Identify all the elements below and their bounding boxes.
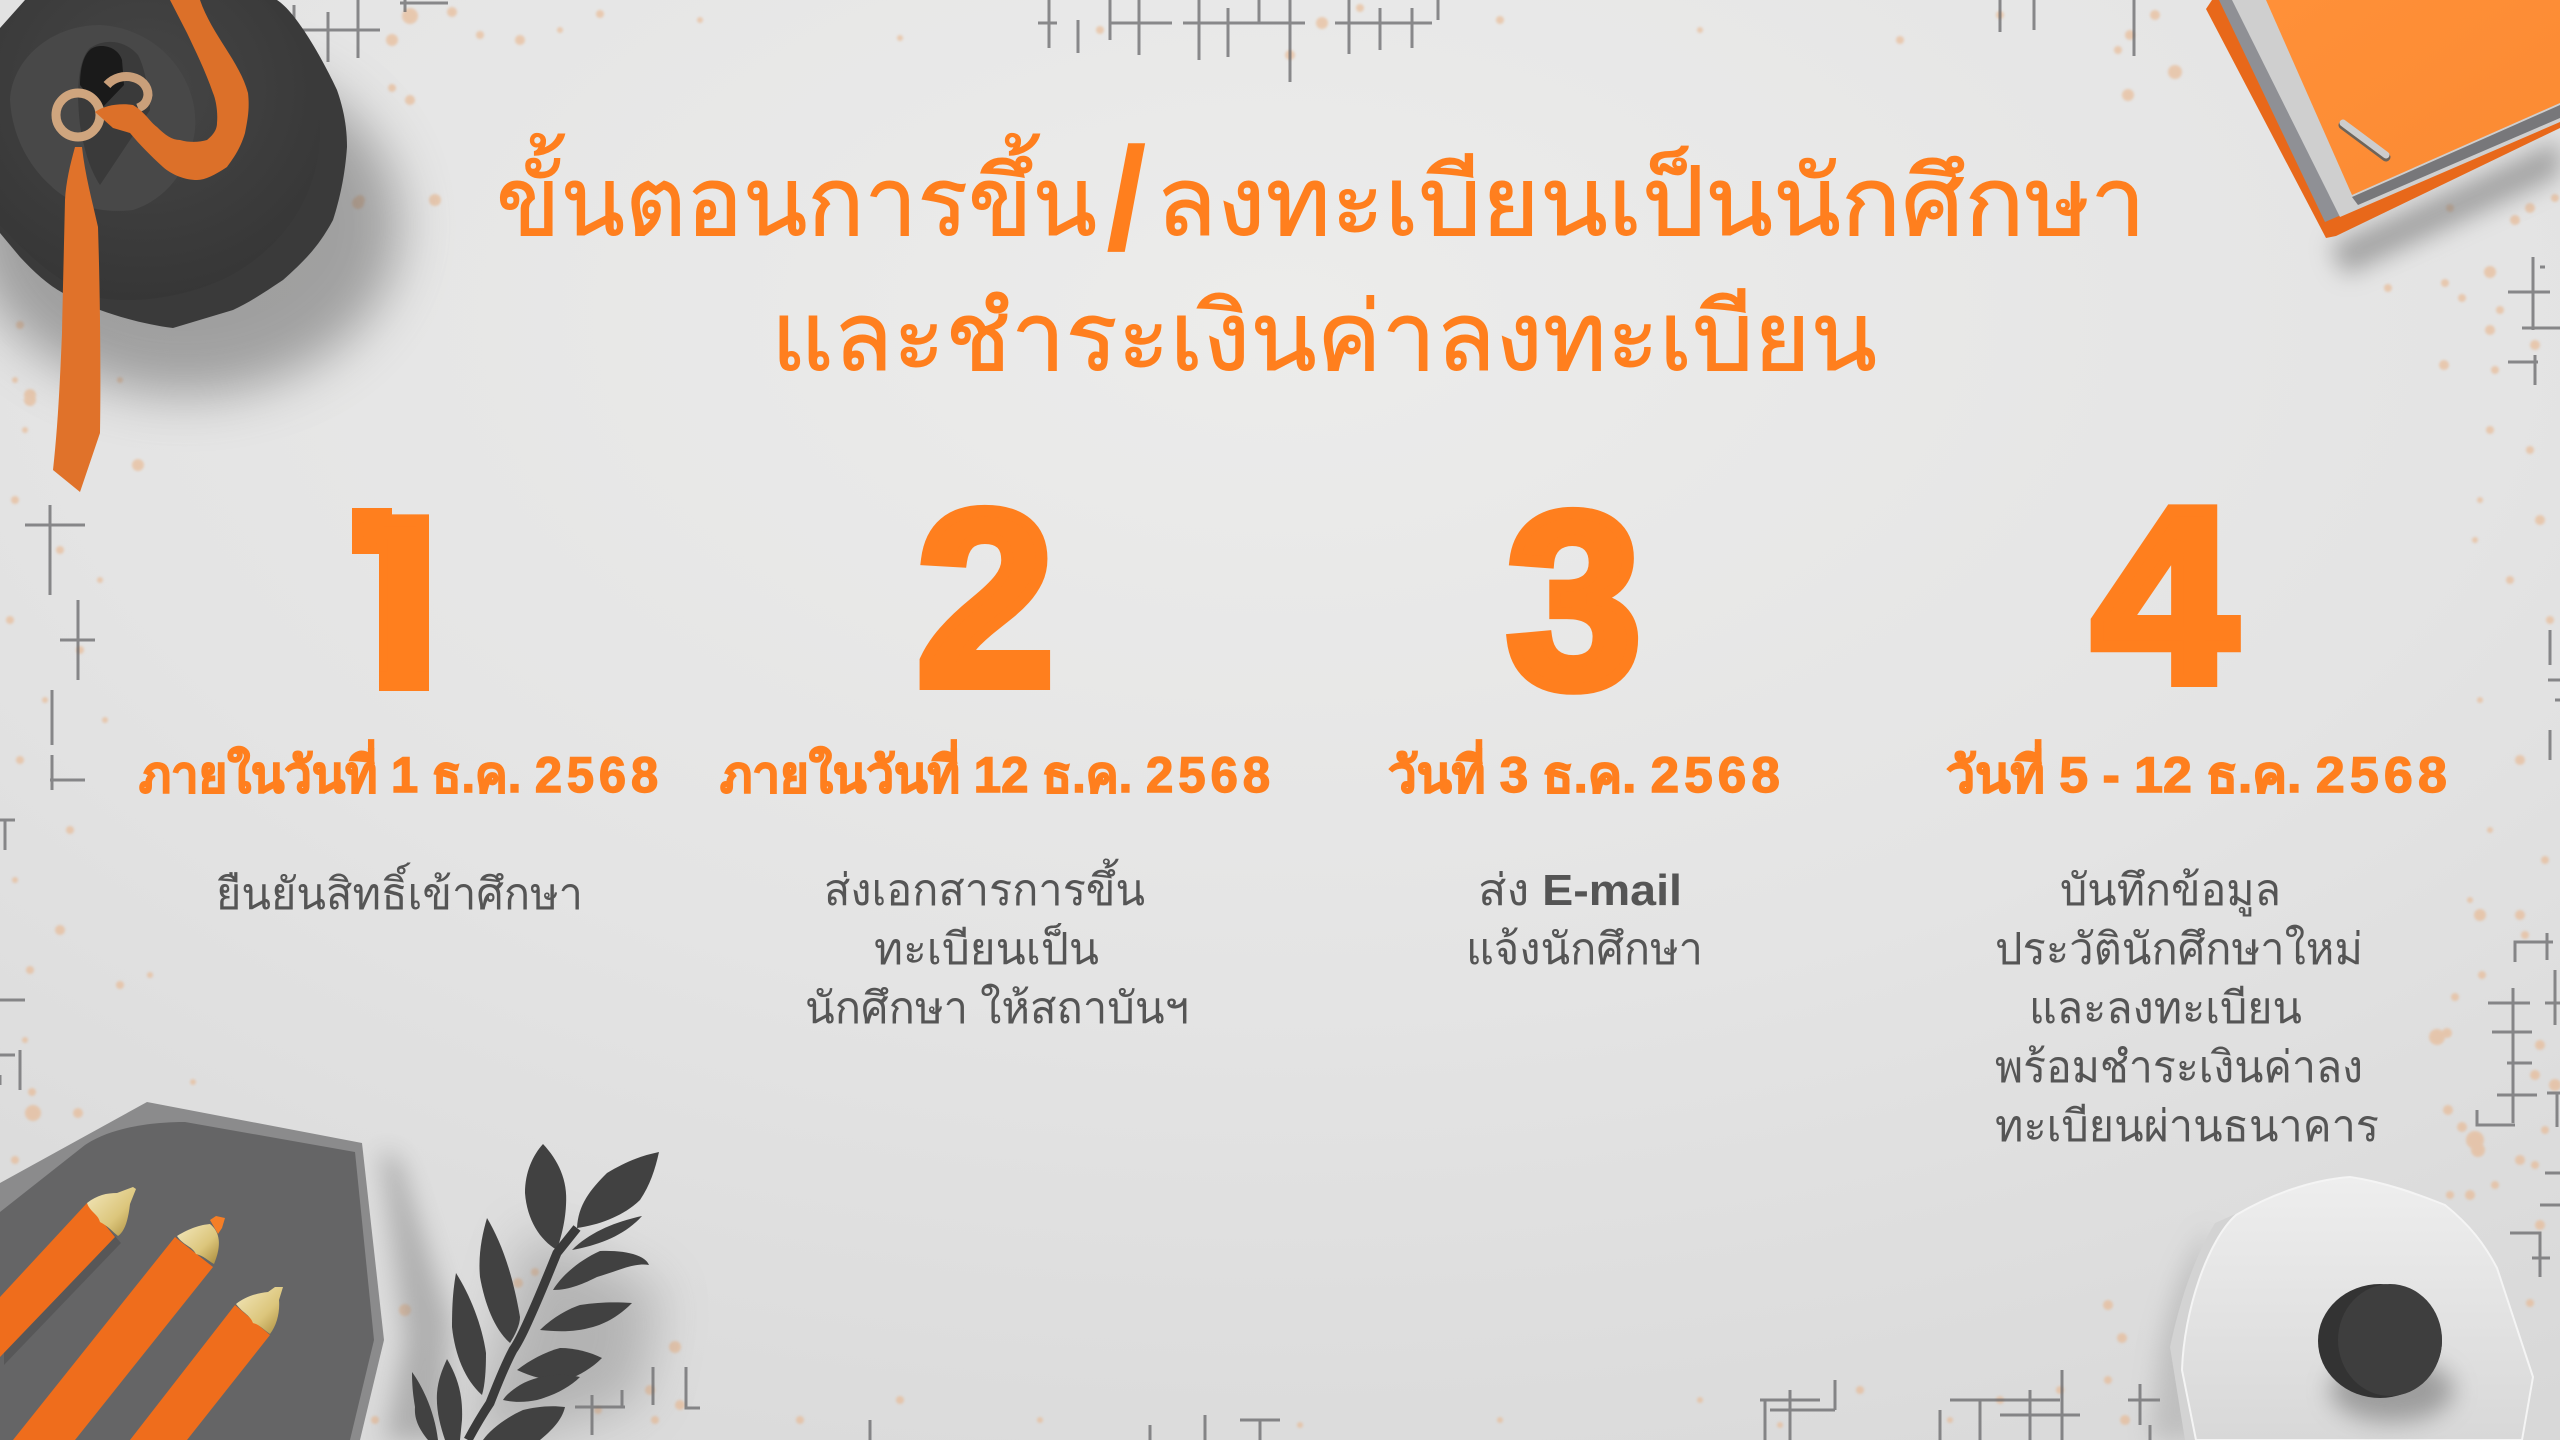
step 2 description: ส่งเอกสารการขึ้น — [824, 858, 1145, 915]
title: ลงทะเบียนเป็นนักศึกษา — [1156, 145, 2146, 256]
knob — [2318, 1284, 2442, 1398]
step 3 — [1388, 461, 1785, 974]
title: / — [1106, 117, 1147, 280]
orange pencils — [0, 1187, 283, 1440]
step 1 number: 1 — [303, 466, 485, 744]
title: ขั้นตอนการขึ้น — [496, 133, 1097, 256]
grey stone tray — [0, 1102, 450, 1440]
step 3 description: แจ้งนักศึกษา — [1466, 925, 1703, 974]
step 4 description — [1995, 866, 2379, 1151]
bell inner disc — [10, 25, 195, 211]
step 1 description: ยืนยันสิทธิ์เข้าศึกษา — [216, 862, 583, 919]
metal pin — [2343, 125, 2386, 157]
step 1 — [139, 508, 658, 910]
step 1 date: ภายในวันที่ 1 ธ.ค. 2568 — [139, 740, 663, 803]
step 1 number — [352, 508, 429, 691]
step 4 description: พร้อมชำระเงินค่าลง — [1995, 1043, 2363, 1092]
dark leaf sprig — [412, 1144, 660, 1440]
step 2 description — [805, 858, 1189, 1033]
title: และชำระเงินค่าลงทะเบียน — [771, 284, 1877, 391]
step 3 number: 3 — [1507, 461, 1641, 739]
step 2 date: ภายในวันที่ 12 ธ.ค. 2568 — [720, 740, 1275, 803]
bell with orange strap — [0, 0, 400, 492]
step 4 description: และลงทะเบียน — [2029, 984, 2302, 1033]
stacked orange books — [2206, 0, 2560, 275]
step 2 description: ทะเบียนเป็น — [874, 923, 1099, 974]
step 3 description: ส่ง E-mail — [1478, 866, 1682, 915]
step 4 date: วันที่ 5 - 12 ธ.ค. 2568 — [1946, 740, 2452, 803]
step 4 description: ประวัตินักศึกษาใหม่ — [1995, 924, 2363, 974]
step 4 number: 4 — [2093, 456, 2236, 734]
step 4 description: บันทึกข้อมูล — [2060, 866, 2281, 917]
step 2 description: นักศึกษา ให้สถาบันฯ — [805, 983, 1189, 1033]
title — [496, 117, 2146, 391]
step 3 description — [1466, 866, 1703, 974]
step 4 — [1946, 456, 2452, 1151]
step 3 date: วันที่ 3 ธ.ค. 2568 — [1388, 740, 1785, 803]
strap — [95, 0, 249, 180]
step 2 — [720, 459, 1275, 1033]
white stone with dark knob — [2150, 1177, 2533, 1440]
metal rings — [56, 93, 100, 137]
step 4 description: ทะเบียนผ่านธนาคาร — [1995, 1102, 2379, 1151]
step 2 number: 2 — [917, 459, 1054, 737]
